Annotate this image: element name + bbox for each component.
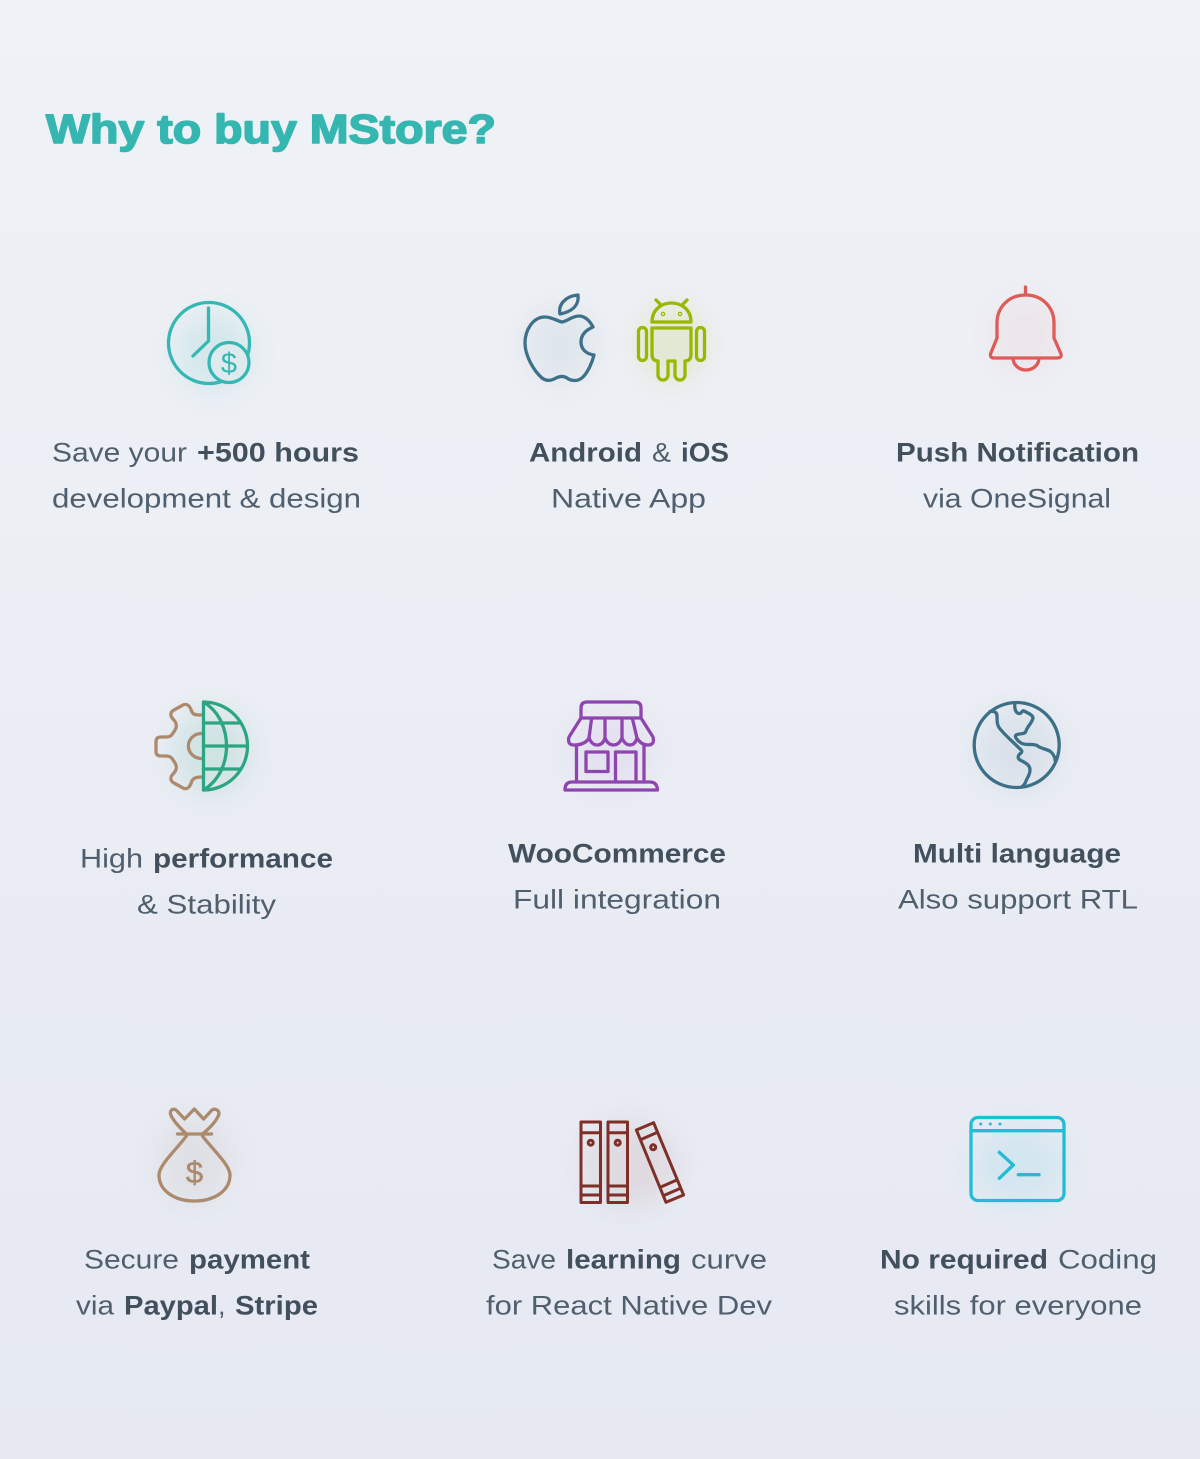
text: learning curve: learning (566, 1244, 681, 1274)
text: learning curve (486, 1244, 773, 1320)
text: high performance: performance (153, 844, 333, 874)
icon: books (581, 1122, 684, 1207)
feature: secure payment (76, 1109, 318, 1320)
icon: globe (974, 702, 1060, 792)
feature: learning curve (486, 1122, 773, 1320)
text: high performance: High (80, 844, 143, 874)
text: woocommerce: WooCommerce (508, 838, 726, 868)
text: push notification: Push Notification (896, 438, 1139, 468)
text: android and ios: Android (529, 438, 642, 468)
feature: native apps (524, 295, 729, 514)
text: multi language: Multi language (913, 838, 1121, 868)
feature: no coding required (880, 1118, 1157, 1320)
text: secure payment: Secure (84, 1244, 179, 1274)
text: multi language: Also support RTL (898, 884, 1138, 914)
text: save hours: +500 hours (197, 438, 359, 468)
text: secure payment: Paypal (124, 1290, 218, 1320)
text: high performance (80, 844, 333, 920)
text: no required coding: No required (880, 1244, 1048, 1274)
text: save hours: development & design (52, 484, 361, 514)
icon: money bag (159, 1109, 231, 1204)
text: no required coding (880, 1244, 1157, 1320)
icon: money bag: $ (186, 1155, 203, 1190)
feature: save development hours (52, 302, 361, 514)
text: push notification: via OneSignal (923, 484, 1111, 514)
text: learning curve: curve (691, 1244, 767, 1274)
text: push notification (896, 438, 1139, 514)
feature: multi language (898, 702, 1138, 914)
icon: apple (524, 295, 596, 383)
icon: android (638, 300, 706, 381)
feature: push notification (896, 287, 1139, 514)
text: secure payment: , (218, 1290, 226, 1320)
icon: terminal window (971, 1118, 1064, 1205)
text: android and ios: Native App (551, 484, 706, 514)
text: save hours (52, 438, 361, 514)
text: android and ios: iOS (681, 438, 729, 468)
text: secure payment: payment (189, 1244, 310, 1274)
text: woocommerce: Full integration (513, 884, 721, 914)
text: save hours: Save your (52, 438, 187, 468)
icon: clock with dollar coin (168, 302, 252, 390)
text: secure payment (76, 1244, 318, 1320)
icon: bell (990, 287, 1062, 373)
text: android and ios: & (652, 438, 671, 468)
title: Why to buy MStore? (46, 106, 496, 152)
icon: clock with dollar coin: $ (221, 348, 237, 380)
feature: woocommerce (508, 702, 726, 914)
icon: gear and globe (156, 702, 250, 794)
text: woocommerce (508, 838, 726, 914)
text: secure payment: Stripe (235, 1290, 318, 1320)
text: no required coding: skills for everyone (894, 1290, 1142, 1320)
text: multi language (898, 838, 1138, 914)
text: high performance: & Stability (137, 890, 277, 920)
icon: store (565, 702, 658, 790)
text: learning curve: Save (492, 1244, 556, 1274)
feature: high performance (80, 702, 333, 920)
text: android and ios (529, 438, 729, 514)
text: learning curve: for React Native Dev (486, 1290, 773, 1320)
text: no required coding: Coding (1058, 1244, 1157, 1274)
text: secure payment: via (76, 1290, 115, 1320)
